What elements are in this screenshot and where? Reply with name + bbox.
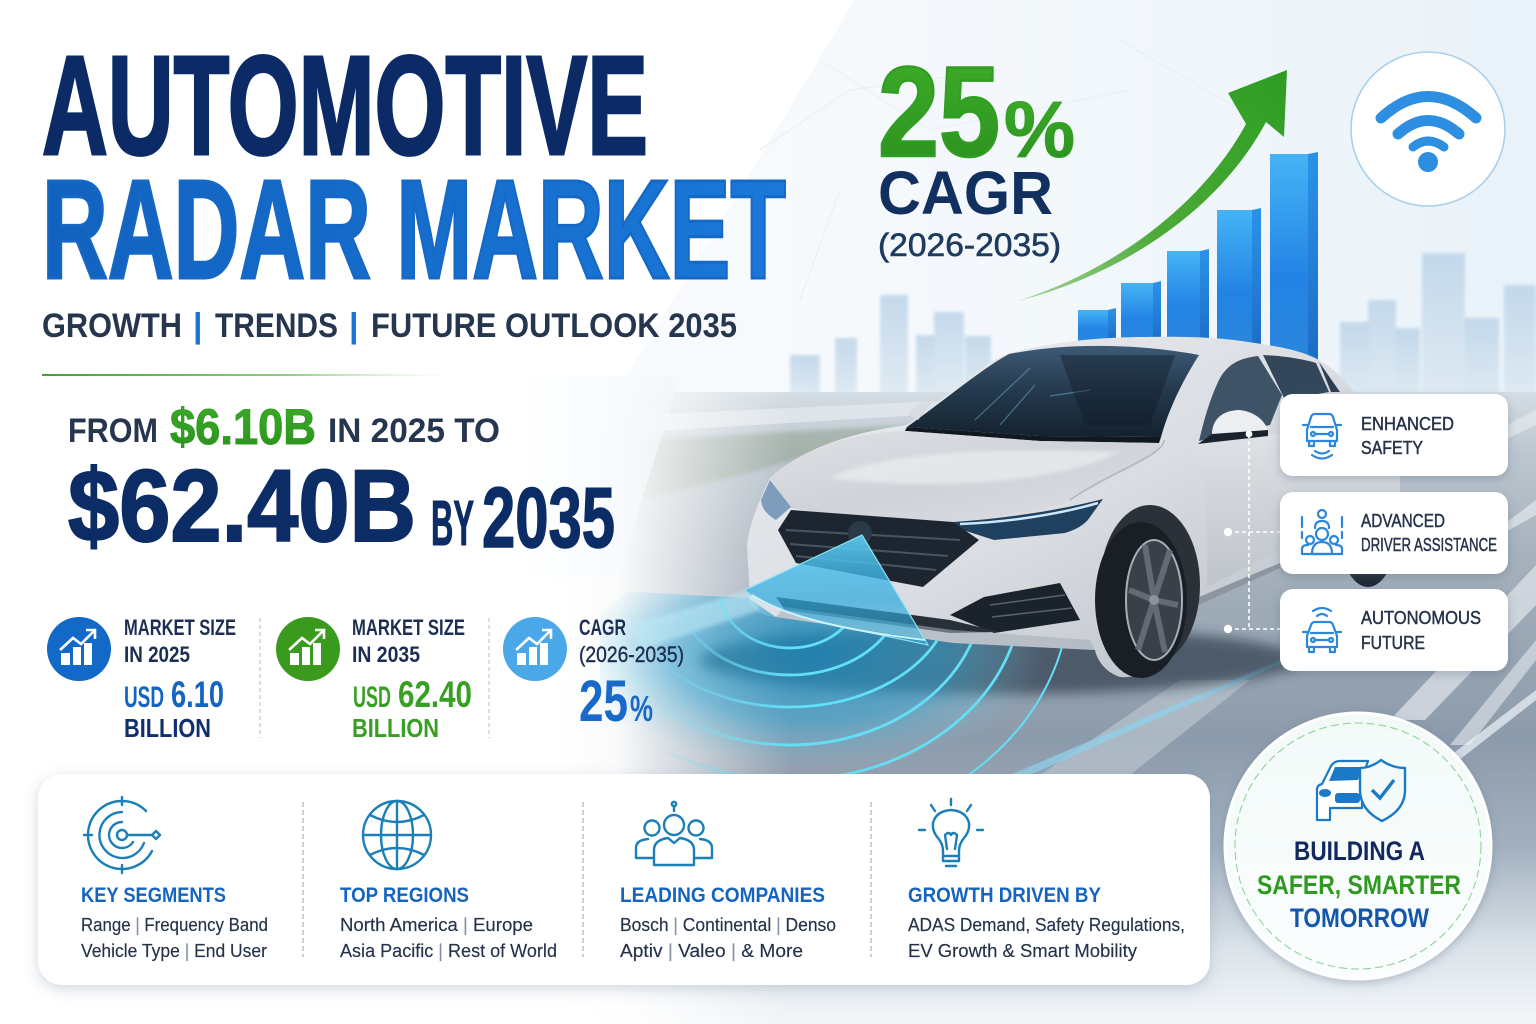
growth arrow [1018,70,1287,301]
feature card: enhanced safety: SAFETY [1361,438,1423,458]
feature card: enhanced safety: ENHANCED [1361,414,1454,434]
leading companies [620,802,836,961]
key segments: KEY SEGMENTS [81,884,226,907]
icon: wifi badge [1351,52,1505,206]
badge: safer smarter tomorrow: BUILDING A [1294,836,1425,866]
icon: car with signal [1303,414,1341,458]
feature card: driver assistance [1280,492,1508,574]
stat: cagr: (2026-2035) [579,642,684,667]
subtitle: TRENDS [215,307,338,345]
key segments [81,797,268,961]
cagr headline: (2026-2035) [878,227,1061,263]
lower intake [950,583,1080,633]
cagr headline: % [1004,85,1075,174]
car body [747,337,1402,677]
city skyline [790,253,1536,403]
badge: safer smarter tomorrow [1225,713,1491,979]
stat: market size 2025: BILLION [124,713,211,743]
icon: people [1302,510,1342,554]
top regions: TOP REGIONS [340,884,469,907]
stat: market size 2035 [276,615,472,743]
radar cone [745,535,928,645]
side windows [1199,356,1282,441]
icon: team [636,802,712,865]
top regions: North America | Europe [340,915,533,935]
growth bar chart [1078,152,1318,360]
stat: market size 2035: 62.40 [398,674,472,715]
top regions [340,801,557,961]
stat: market size 2035: USD [353,681,391,714]
right headlight [953,499,1103,540]
badge: safer smarter tomorrow: SAFER, SMARTER [1257,870,1461,900]
growth drivers: EV Growth & Smart Mobility [908,941,1137,961]
icon: chart [276,617,340,681]
subtitle: | [193,307,203,345]
icon: connected car [1303,608,1341,652]
panel: market forecast: FROM [68,412,158,450]
mirror [1212,410,1268,434]
cagr headline: 25 [878,41,1000,184]
feature card: enhanced safety [1280,394,1508,476]
stat: cagr: % [630,688,653,729]
hood [770,431,1160,522]
stat: cagr [503,615,684,734]
rear wheel [1339,473,1397,587]
title [42,26,786,308]
stat: cagr: 25 [579,669,628,734]
stat: market size 2025: USD [124,681,164,714]
growth drivers: ADAS Demand, Safety Regulations, [908,915,1185,935]
feature card: driver assistance: ADVANCED [1361,511,1445,531]
feature card: autonomous future [1280,589,1508,671]
panel: market forecast: $6.10B [170,399,316,455]
icon: chart [503,617,567,681]
stat: market size 2035: MARKET SIZE [352,615,465,640]
top regions: Asia Pacific | Rest of World [340,941,557,961]
left headlight [761,480,791,520]
subtitle [42,307,737,345]
icon: radar target [84,797,160,873]
feature card: autonomous future: FUTURE [1361,633,1425,653]
badge: safer smarter tomorrow: TOMORROW [1290,903,1429,933]
icon: car and shield [1317,760,1405,821]
windshield [907,346,1199,437]
stat: market size 2025: MARKET SIZE [124,615,236,640]
subtitle: GROWTH [42,307,182,345]
icon: globe [363,801,431,869]
stat: cagr: CAGR [579,615,626,640]
stat: market size 2035: IN 2035 [352,642,420,667]
panel: market forecast: $62.40B [68,449,416,563]
road scene [560,392,1536,1024]
feature card: autonomous future: AUTONOMOUS [1361,608,1481,628]
subtitle: | [349,307,359,345]
stat: market size 2025: IN 2025 [124,642,190,667]
title: RADAR MARKET [42,150,786,308]
side door panel [1189,434,1400,587]
car [700,337,1402,694]
panel: market forecast [38,374,680,578]
growth drivers: GROWTH DRIVEN BY [908,884,1101,907]
key segments: Vehicle Type | End User [81,941,267,961]
connector lines [1225,431,1282,632]
cagr headline [878,41,1075,263]
panel: market forecast: 2035 [482,471,615,566]
growth drivers [908,799,1185,961]
panel: market forecast: BY [431,487,474,559]
icon: light bulb [919,799,983,866]
grille [778,510,979,587]
subtitle: FUTURE OUTLOOK 2035 [371,307,737,345]
stat: market size 2035: BILLION [352,713,439,743]
cagr headline: CAGR [878,159,1053,227]
leading companies: LEADING COMPANIES [620,884,825,907]
leading companies: Bosch | Continental | Denso [620,915,836,935]
leading companies: Aptiv | Valeo | & More [620,941,803,961]
icon: chart [47,617,111,681]
stat: market size 2025: 6.10 [171,674,224,715]
key segments: Range | Frequency Band [81,915,268,935]
radar waves [600,534,1062,774]
stat: market size 2025 [47,615,236,743]
panel: market details [38,774,1210,985]
title: AUTOMOTIVE [42,26,648,184]
front wheel [1095,505,1200,678]
panel: market forecast: IN 2025 TO [328,412,500,450]
